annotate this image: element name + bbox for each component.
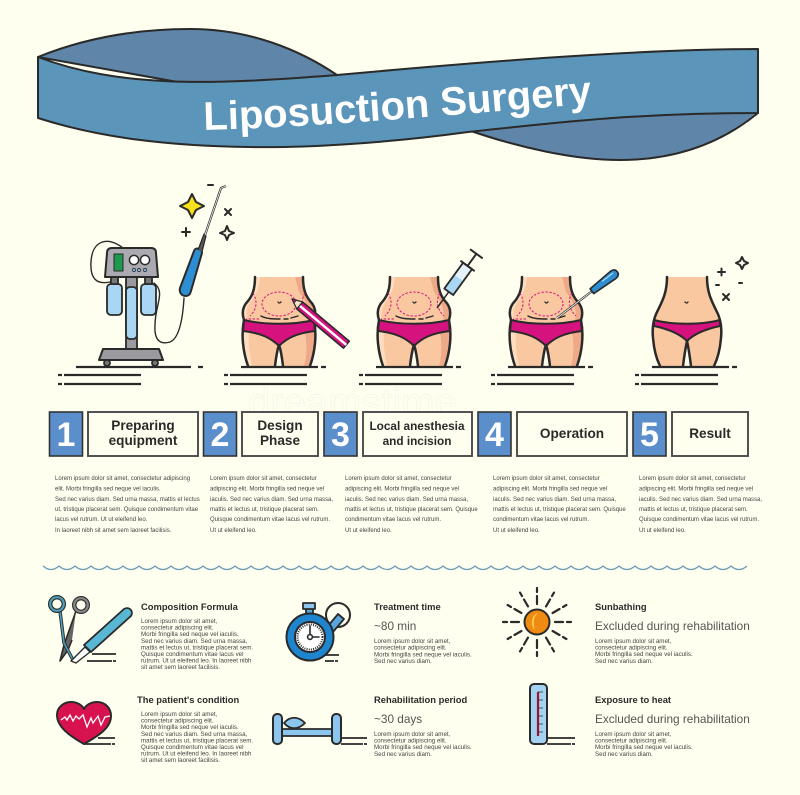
step 2: Phase (260, 433, 300, 448)
text: step 5: Ut ut eleifend leo. (639, 528, 686, 534)
block: exposure to heat: Exposure to heat (595, 694, 671, 705)
text: step 4: Ut ut eleifend leo. (493, 528, 540, 534)
block: rehabilitation period: Rehabilitation period (374, 694, 468, 705)
text: step 1: Lorem ipsum dolor sit amet, consectetur adipiscing (55, 476, 190, 482)
icon: thermometer (530, 684, 575, 744)
block: sunbathing: consectetur adipiscing elit. (595, 645, 668, 652)
block: treatment time: Morbi fringilla sed neque vel iaculis. (374, 651, 472, 658)
text: step 2: Ut ut eleifend leo. (210, 528, 257, 534)
illustration: anesthesia body with syringe (359, 249, 483, 384)
text: step 2 (210, 476, 333, 534)
text: step 3: Lorem ipsum dolor sit amet, consectetur (345, 476, 452, 482)
text: step 1: elit. Morbi fringilla sed neque vel iaculis. (55, 486, 161, 492)
block: composition formula: Morbi fringilla sed neque vel iaculis. (141, 631, 239, 638)
block: treatment time (374, 601, 472, 665)
text: step 3: mattis et lectus ut, tristique placerat sem. Quisque (345, 507, 478, 513)
step 1 (50, 412, 198, 456)
block: exposure to heat: consectetur adipiscing elit. (595, 738, 668, 745)
block: sunbathing: Lorem ipsum dolor sit amet, (595, 638, 672, 645)
text: step 3: condimentum vitae lacus vel rutrum. (345, 517, 441, 523)
block: rehabilitation period: consectetur adipiscing elit. (374, 738, 447, 745)
block: patient's condition: sit amet sem laoreet facilisis. (141, 757, 220, 764)
block: composition formula: Composition Formula (141, 601, 239, 612)
text: step 1: lacus vel rutrum. Ut ut eleifend leo. (55, 517, 148, 523)
icon: bed (273, 714, 367, 744)
text: step 2: Lorem ipsum dolor sit amet, consectetur (210, 476, 317, 482)
step 1 ground lines (58, 367, 203, 384)
block: composition formula: Sed nec varius diam. Sed urna massa, (141, 638, 248, 645)
text: step 2: iaculis. Sed nec varius diam. Sed urna massa, (210, 497, 333, 503)
block: rehabilitation period: Sed nec varius diam. (374, 751, 432, 758)
step 5 (633, 412, 748, 456)
block: treatment time: Lorem ipsum dolor sit amet, (374, 638, 451, 645)
icon: sparkles (180, 185, 234, 240)
text: step 4: condimentum vitae lacus vel rutrum. (493, 517, 589, 523)
step 2: 2 (211, 416, 229, 454)
text: step 2: mattis et lectus ut, tristique placerat sem. (210, 507, 319, 513)
text: step 1: In laoreet nibh sit amet sem laoreet facilisis. (55, 528, 172, 534)
text: step 2: Quisque condimentum vitae lacus vel rutrum. (210, 517, 330, 523)
text: step 4: mattis et lectus ut, tristique placerat sem. Quisque (493, 507, 626, 513)
icon: scissors and scalpel (50, 597, 132, 663)
block: patient's condition: rutrum. Ut ut eleifend leo. In laoreet nibh (141, 751, 252, 758)
step 1: Preparing (111, 418, 175, 433)
block: sunbathing: Sunbathing (595, 601, 647, 612)
block: rehabilitation period: Lorem ipsum dolor sit amet, (374, 731, 451, 738)
step 3: and incision (383, 434, 451, 448)
block: composition formula: Quisque condimentum vitae lacus vel (141, 651, 244, 658)
step 4 (478, 412, 627, 456)
text: step 4: adipiscing elit. Morbi fringilla sed neque vel (493, 486, 607, 492)
watermark: dreamstime (248, 381, 457, 425)
text: step 4: Lorem ipsum dolor sit amet, consectetur (493, 476, 600, 482)
text: step 5: Lorem ipsum dolor sit amet, consectetur (639, 476, 746, 482)
block: patient's condition: Sed nec varius diam. Sed urna massa, (141, 731, 248, 738)
block: exposure to heat: Lorem ipsum dolor sit amet, (595, 731, 672, 738)
title: Liposuction Surgery (206, 82, 590, 137)
block: treatment time: consectetur adipiscing elit. (374, 645, 447, 652)
text: step 4: iaculis. Sed nec varius diam. Sed urna massa, (493, 497, 616, 503)
text: step 5: mattis et lectus ut, tristique placerat sem. (639, 507, 748, 513)
block: patient's condition (137, 694, 253, 764)
title banner (37, 28, 759, 161)
block: patient's condition: consectetur adipiscing elit. (141, 718, 214, 725)
block: rehabilitation period: Morbi fringilla sed neque vel iaculis. (374, 744, 472, 751)
step 2: Design (257, 418, 303, 433)
block: exposure to heat: Sed nec varius diam. (595, 751, 653, 758)
step 5: Result (689, 426, 731, 441)
icon: heart with pulse (57, 702, 115, 744)
step 3: 3 (331, 416, 350, 454)
block: patient's condition: Quisque condimentum vitae lacus vel (141, 744, 244, 751)
text: step 2: adipiscing elit. Morbi fringilla sed neque vel (210, 486, 324, 492)
step 3 (324, 412, 472, 456)
text: step 1: Sed nec varius diam. Sed urna massa, mattis et lectus (55, 497, 200, 503)
text: step 5: Quisque condimentum vitae lacus vel rutrum. (639, 517, 759, 523)
block: rehabilitation period (374, 694, 472, 758)
wave divider (43, 566, 747, 570)
text: step 5: iaculis. Sed nec varius diam. Sed urna massa, (639, 497, 762, 503)
step 1: equipment (109, 433, 178, 448)
text: step 1 (55, 476, 200, 534)
block: sunbathing: Excluded during rehabilitation (595, 619, 750, 633)
step 2 (204, 412, 318, 456)
illustration: design phase body with pencil (224, 277, 349, 384)
block: treatment time: Treatment time (374, 601, 441, 612)
step 3: Local anesthesia (369, 419, 465, 433)
block: patient's condition: Morbi fringilla sed neque vel iaculis. (141, 724, 239, 731)
illustration: operation body with cannula (491, 268, 620, 384)
block: composition formula: consectetur adipiscing elit. (141, 625, 214, 632)
block: sunbathing: Morbi fringilla sed neque vel iaculis. (595, 651, 693, 658)
step 4: 4 (485, 416, 504, 454)
text: step 3: iaculis. Sed nec varius diam. Sed urna massa, (345, 497, 468, 503)
icon: liposuction machine (91, 186, 226, 366)
block: exposure to heat: Morbi fringilla sed neque vel iaculis. (595, 744, 693, 751)
block: composition formula (141, 601, 253, 671)
block: patient's condition: mattis et lectus ut, tristique placerat sem. (141, 737, 253, 744)
block: exposure to heat (595, 694, 750, 758)
block: composition formula: rutrum. Ut ut eleifend leo. In laoreet nibh (141, 658, 252, 665)
step 1: 1 (57, 416, 75, 454)
block: composition formula: mattis et lectus ut, tristique placerat sem. (141, 644, 253, 651)
text: step 5: adipiscing elit. Morbi fringilla sed neque vel (639, 486, 753, 492)
text: step 3 (345, 476, 478, 534)
text: step 3: adipiscing elit. Morbi fringilla sed neque vel (345, 486, 459, 492)
step 5: 5 (640, 416, 659, 454)
block: sunbathing (595, 601, 750, 665)
text: step 3: Ut ut eleifend leo. (345, 528, 392, 534)
block: sunbathing: Sed nec varius diam. (595, 658, 653, 665)
block: treatment time: ~80 min (374, 619, 416, 633)
block: composition formula: Lorem ipsum dolor sit amet, (141, 618, 218, 625)
text: step 1: ut, tristique placerat sem. Quisque condimentum vitae (55, 507, 199, 513)
block: composition formula: sit amet sem laoreet facilisis. (141, 664, 220, 671)
block: patient's condition: Lorem ipsum dolor sit amet, (141, 711, 218, 718)
illustration: result slim body (635, 257, 748, 384)
icon: sun (503, 588, 571, 656)
block: exposure to heat: Excluded during rehabilitation (595, 712, 750, 726)
block: patient's condition: The patient's condition (137, 694, 240, 705)
icon: stopwatch (286, 603, 350, 661)
text: step 5 (639, 476, 762, 534)
step 4: Operation (540, 426, 604, 441)
block: rehabilitation period: ~30 days (374, 712, 422, 726)
text: step 4 (493, 476, 626, 534)
block: treatment time: Sed nec varius diam. (374, 658, 432, 665)
